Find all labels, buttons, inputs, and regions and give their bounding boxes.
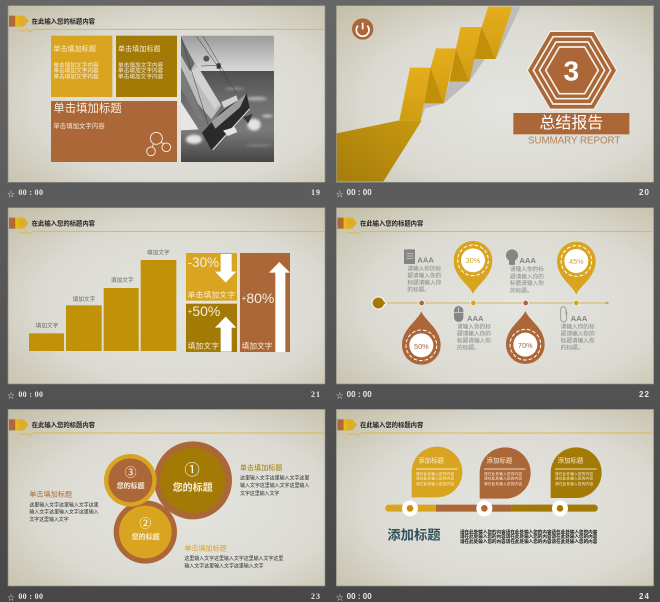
text block: left: 文字这里输入文字 [29,516,69,523]
bubble 3: 请在此处输入您的内容 [555,471,593,476]
footer 24: 24 [639,592,650,601]
panel: dark gold tile: 单击填加文字内容 [118,72,164,80]
slide 19 header: 在此输入您的标题内容 [32,16,96,25]
slide 21 header [9,218,324,234]
drop: 50 percent: 50% [414,342,429,351]
panel: dark gold tile: 单击填加标题 [118,44,161,53]
slide 20: section cover [336,6,654,198]
folded ribbon [337,7,521,182]
circle 1: ① [184,462,200,479]
footer 20: 20 [639,188,650,197]
slide 24: bubbles on a progress bar [336,409,654,602]
footer 22: 00 : 00 [347,390,372,399]
bubble 3: 添加标题 [558,455,584,464]
circle 2: ② [139,517,151,531]
slide 24 texture [336,409,654,586]
footer 21: ☆ [7,391,15,400]
text block: right: 这里输入文字这里输入文字这里 [240,475,309,482]
text block with bulb icon: 标题请输入你 [510,279,544,287]
bar chart: 填加文字 [111,276,134,284]
title banner [513,113,629,134]
slide 22: timeline with pins [336,208,654,400]
text block: left: 单击填加标题 [29,489,72,498]
pin: 45 percent [557,242,596,295]
text block with mouse icon: 题请输入你的 [457,330,491,338]
slide 19: tiles and photo [7,6,325,198]
panel: plus 80 percent [240,253,290,352]
slide 19 header [9,16,324,32]
circle 2 [114,500,177,564]
text block with paperclip icon [561,307,595,352]
panel: plus 80 percent: 填加文字 [242,340,273,350]
footer 19: 00 : 00 [18,188,43,197]
panel: plus 50 percent: +50% [188,303,220,319]
text block with paperclip icon: 标题请输入你 [561,337,595,345]
footer 19: 19 [311,188,320,197]
slide 23 header [9,419,324,435]
body text: 请在此处输入您的内容请在此处输入您的内容请在此处输入您的内容 [460,528,598,535]
panel: gold tile: 单击填加文字内容 [53,72,99,80]
panel: gold tile: 单击填加文字内容 [53,66,99,74]
slide 21 texture [8,208,325,384]
text block with paperclip icon: 题请输入你的 [561,330,595,338]
bubble 2: 请在此处输入您的内容 [484,481,522,486]
panel: brown tile: 单击填加文字内容 [53,121,105,130]
panel: dark gold tile: 单击填加文字内容 [118,61,164,69]
drop: 50 percent [402,311,441,365]
bubble 2: 请在此处输入您的内容 [484,476,522,481]
slide 22 header [337,218,652,234]
text block with paperclip icon: AAA [571,314,588,323]
text block with mouse icon: 请输入你的标 [457,322,491,330]
subtitle: SUMMARY REPORT [528,135,621,146]
bar chart [29,248,176,351]
pin: 30 percent [454,241,492,294]
body text: 请在此处输入您的内容请在此处输入您的内容请在此处输入您的内容 [460,538,598,545]
slide 20 texture [336,6,654,182]
text block: bottom [184,543,283,569]
circle 3: 您的标题 [117,481,145,490]
text block: left [29,489,99,523]
heading: 添加标题 [387,527,441,542]
circle 1: 您的标题 [173,481,213,494]
panel: minus 30 percent: 单击填加文字 [188,289,235,299]
text block with notebook icon: 请输入你的标 [407,264,442,272]
bubble 2: 请在此处输入您的内容 [484,471,522,476]
icon: linked circles [147,132,171,156]
text block with bulb icon [506,249,544,294]
text block with bulb icon: 的标题。 [510,286,533,294]
panel: plus 80 percent: +80% [242,290,274,306]
text block with notebook icon: 标题请输入你 [407,278,442,286]
text block with mouse icon: 标题请输入你 [457,337,491,345]
circle 1 [154,441,232,519]
slide 24 header [337,419,652,435]
panel: minus 30 percent: -30% [188,254,219,270]
footer 23: 00 : 00 [18,592,43,601]
panel: gold tile: 单击填加标题 [53,44,96,53]
footer 21: 21 [311,390,320,399]
footer 23: ☆ [7,593,15,602]
panel: minus 30 percent [186,253,237,301]
bubble 2: 添加标题 [487,455,513,464]
text block with bulb icon: 请输入你的标 [510,265,544,273]
footer 23: 23 [311,592,320,601]
bar chart: 填加文字 [36,321,59,329]
text block with paperclip icon: 的标题。 [561,344,583,352]
slide 21 header: 在此输入您的标题内容 [32,218,96,227]
hexagon badge with number 3: 3 [564,55,579,86]
text block: bottom: 单击填加标题 [184,543,227,552]
body text: 请在此处输入您的内容请在此处输入您的内容请在此处输入您的内容 [460,533,598,540]
panel: plus 50 percent: 填加文字 [188,340,219,350]
drop: 70 percent [506,311,545,364]
footer 20: 00 : 00 [347,188,372,197]
bubble 3: 请在此处输入您的内容 [555,476,593,481]
pin: 45 percent: 45% [569,257,584,266]
footer 19: ☆ [7,189,15,198]
bubble 1: 请在此处输入您的内容 [416,481,454,486]
slide 23 texture [8,409,325,586]
footer 21: 00 : 00 [18,390,43,399]
text block: right: 单击填加标题 [240,463,282,472]
text block: bottom: 这里输入文字这里输入文字这里输入文字这里 [184,555,283,562]
slide 22 texture [336,208,654,384]
slide 22 header: 在此输入您的标题内容 [360,218,424,227]
bubble 1 [412,447,462,497]
panel: dark gold tile: 单击填加文字内容 [118,66,164,74]
text block with notebook icon [404,249,442,294]
footer 22: ☆ [336,391,344,400]
text block with paperclip icon: 请输入你的标 [561,322,595,330]
bubble 3: 请在此处输入您的内容 [555,481,593,486]
arrow: tall up [269,262,290,352]
panel: dark gold tile [116,36,177,97]
bar chart: 填加文字 [147,248,170,256]
text block: right [240,463,309,497]
bubble 1: 请在此处输入您的内容 [416,471,454,476]
slide 19 texture [8,6,325,182]
title banner: 总结报告 [539,114,603,132]
hexagon badge with number 3 [527,31,617,110]
bubble 2 [480,447,531,499]
footer 24 [336,592,650,602]
slide 20 background [336,6,654,182]
slide 21: bar chart and percent tiles [7,208,325,400]
text block: right: 文字这里输入文字 [240,490,279,497]
footer 20: ☆ [336,189,344,198]
panel: plus 50 percent [186,303,237,352]
panel: gold tile: 单击填加文字内容 [53,61,99,69]
circle 3 [104,454,157,507]
slide 22 background [336,208,654,384]
circle 3: ③ [125,465,137,479]
text block with notebook icon: AAA [417,255,434,264]
panel: brown tile: 单击填加标题 [53,101,122,115]
text block with notebook icon: 题请输入你的 [407,272,442,280]
slide 23: overlapping circles [7,409,325,602]
footer 24: 00 : 00 [347,592,372,601]
slide 23 background [8,409,325,586]
text block with mouse icon: 的标题。 [457,344,480,352]
timeline axis [372,297,609,309]
panel: gold tile [51,36,112,97]
text block with bulb icon: 题请输入你的 [510,272,544,280]
footer 22 [336,390,650,400]
arrow: down [215,254,236,283]
drop: 70 percent: 70% [518,341,533,350]
text block: left: 这里输入文字这里输入文字这里 [29,501,99,508]
text block with mouse icon: AAA [467,314,484,323]
progress bar [385,500,598,516]
circle 2: 您的标题 [132,532,160,541]
text block with notebook icon: 的标题。 [407,286,430,294]
bubble 1: 请在此处输入您的内容 [416,476,454,481]
text block with bulb icon: AAA [519,256,536,265]
text block: right: 输入文字这里输入文字这里输入 [240,482,309,489]
slide 24 header: 在此输入您的标题内容 [360,420,424,429]
pin: 30 percent: 30% [466,256,481,265]
footer 22: 22 [639,390,650,399]
slide 24 background [336,409,654,586]
bubble 1: 添加标题 [418,455,445,464]
footer 23 [7,592,320,602]
panel: brown tile [51,101,177,162]
text block: left: 输入文字这里输入文字这里输入 [29,508,99,515]
footer 19 [7,188,320,198]
slide 23 header: 在此输入您的标题内容 [32,420,96,429]
slide 19 background [8,6,325,182]
footer 21 [7,390,320,400]
text block with mouse icon [454,306,491,352]
arrow: up [215,317,236,352]
footer 24: ☆ [336,593,344,602]
bar chart: 填加文字 [73,295,96,303]
slide 21 background [8,208,325,384]
photo: sailing yacht [181,36,274,162]
icon: power button [352,18,373,40]
text block: bottom: 输入文字这里输入文字这里输入文字 [184,562,264,569]
body text [460,528,598,545]
footer 20 [336,188,650,198]
bubble 3 [551,447,602,498]
